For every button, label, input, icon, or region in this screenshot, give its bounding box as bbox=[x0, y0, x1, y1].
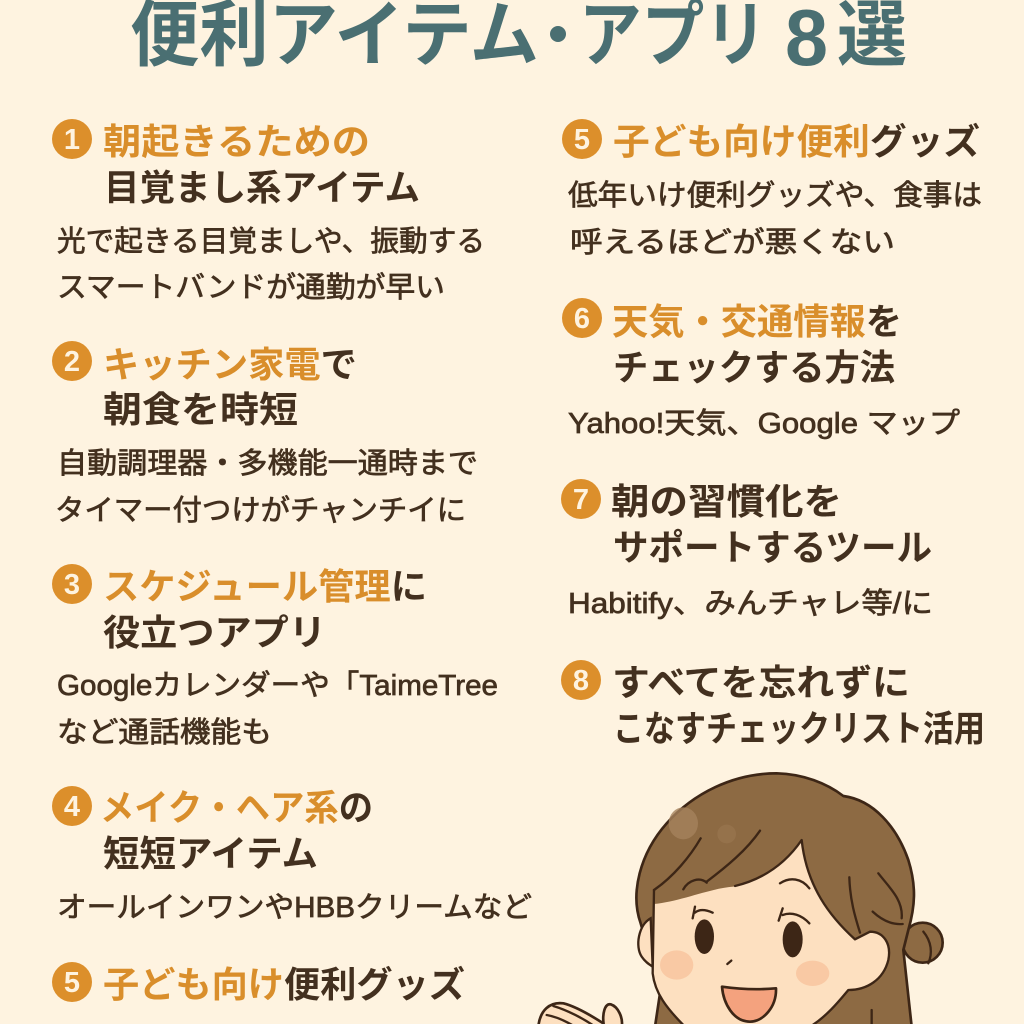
badge 6 bbox=[562, 298, 602, 338]
badge 2: 2 bbox=[64, 346, 80, 378]
heading 5: 子ども向け便利グッズ bbox=[613, 121, 980, 162]
nose bbox=[727, 961, 731, 964]
badge 3 bbox=[52, 564, 92, 604]
heading 2 bbox=[103, 344, 357, 430]
body 3: など通話機能も bbox=[57, 716, 272, 749]
heading 1 bbox=[103, 121, 420, 208]
badge 6: 6 bbox=[574, 303, 590, 335]
badge 8: 8 bbox=[573, 665, 589, 697]
heading 7 bbox=[611, 481, 932, 568]
body 2 bbox=[55, 447, 478, 527]
panel: item 1 bbox=[52, 119, 485, 304]
heading 8: すべてを忘れずに bbox=[612, 662, 910, 703]
heading 6: チェックする方法 bbox=[613, 347, 895, 388]
back hair bbox=[636, 773, 914, 1024]
body 4: オールインワンやHBBクリームなど bbox=[57, 892, 532, 924]
badge 2 bbox=[52, 341, 92, 381]
cheeks bbox=[660, 950, 829, 986]
panel: item 5 bbox=[562, 119, 982, 259]
hand bbox=[538, 1003, 622, 1024]
body 5: 低年いけ便利グッズや、食事は bbox=[568, 179, 982, 212]
heading 2: 朝食を時短 bbox=[103, 389, 298, 430]
heading 4: メイク・ヘア系の bbox=[100, 787, 373, 828]
badge 5: 5 bbox=[574, 124, 590, 156]
panel: item 2 bbox=[52, 341, 478, 527]
badge 4: 4 bbox=[64, 791, 80, 823]
badge 1: 1 bbox=[64, 124, 80, 156]
hair highlight bbox=[669, 807, 736, 843]
heading 4 bbox=[100, 787, 373, 874]
badge 8 bbox=[561, 660, 601, 700]
panel: item 5 (left repeat) bbox=[52, 962, 465, 1005]
heading 4: 短短アイテム bbox=[103, 833, 318, 874]
badge 4 bbox=[52, 786, 92, 826]
heading 3: スケジュール管理に bbox=[103, 566, 427, 607]
body 6: Yahoo!天気、Google マップ bbox=[568, 407, 960, 440]
heading 3: 役立つアプリ bbox=[103, 612, 326, 653]
heading 6: 天気・交通情報を bbox=[612, 301, 902, 342]
heading 1: 目覚まし系アイテム bbox=[104, 167, 420, 208]
badge 5 bbox=[562, 119, 602, 159]
badge 3: 3 bbox=[64, 569, 80, 601]
face bbox=[653, 840, 889, 1024]
title bbox=[130, 0, 907, 82]
body 2: タイマー付つけがチャンチイに bbox=[55, 494, 466, 527]
panel: item 7 bbox=[561, 479, 933, 620]
panel: item 4 bbox=[52, 786, 532, 924]
hair strands bbox=[654, 831, 903, 1024]
eyes bbox=[695, 919, 803, 957]
hair bun bbox=[903, 923, 943, 963]
mouth bbox=[722, 987, 776, 1022]
panel: item 3 bbox=[52, 564, 498, 749]
badge 5 left: 5 bbox=[64, 967, 80, 999]
body 1: スマートバンドが通勤が早い bbox=[57, 271, 445, 304]
body 1 bbox=[57, 225, 485, 304]
panel: item 6 bbox=[562, 298, 960, 440]
badge 5 left bbox=[52, 962, 92, 1002]
heading 2: キッチン家電で bbox=[103, 344, 357, 385]
body 5 bbox=[568, 179, 982, 259]
badge 1 bbox=[52, 119, 92, 159]
body 5: 呼えるほどが悪くない bbox=[570, 226, 895, 259]
panel: item 8 bbox=[561, 660, 985, 749]
illustration: smiling woman bbox=[538, 773, 943, 1024]
heading 1: 朝起きるための bbox=[103, 121, 370, 162]
eyebrows bbox=[693, 879, 809, 923]
body 2: 自動調理器・多機能一通時まで bbox=[57, 447, 478, 480]
heading 6 bbox=[612, 301, 902, 388]
body 3: Googleカレンダーや「TaimeTree bbox=[57, 669, 498, 702]
heading 7: 朝の習慣化を bbox=[611, 481, 842, 522]
left ear bbox=[638, 918, 653, 967]
body 1: 光で起きる目覚ましや、振動する bbox=[57, 225, 485, 258]
heading 8 bbox=[612, 662, 985, 749]
heading 7: サポートするツール bbox=[613, 527, 932, 568]
body 3 bbox=[57, 669, 498, 749]
body 7: Habitify、みんチャレ等/に bbox=[568, 587, 933, 620]
badge 7: 7 bbox=[573, 484, 589, 516]
heading 3 bbox=[103, 566, 427, 653]
badge 7 bbox=[561, 479, 601, 519]
heading 5 left: 子ども向け便利グッズ bbox=[103, 964, 465, 1005]
face outline bbox=[653, 840, 889, 1024]
